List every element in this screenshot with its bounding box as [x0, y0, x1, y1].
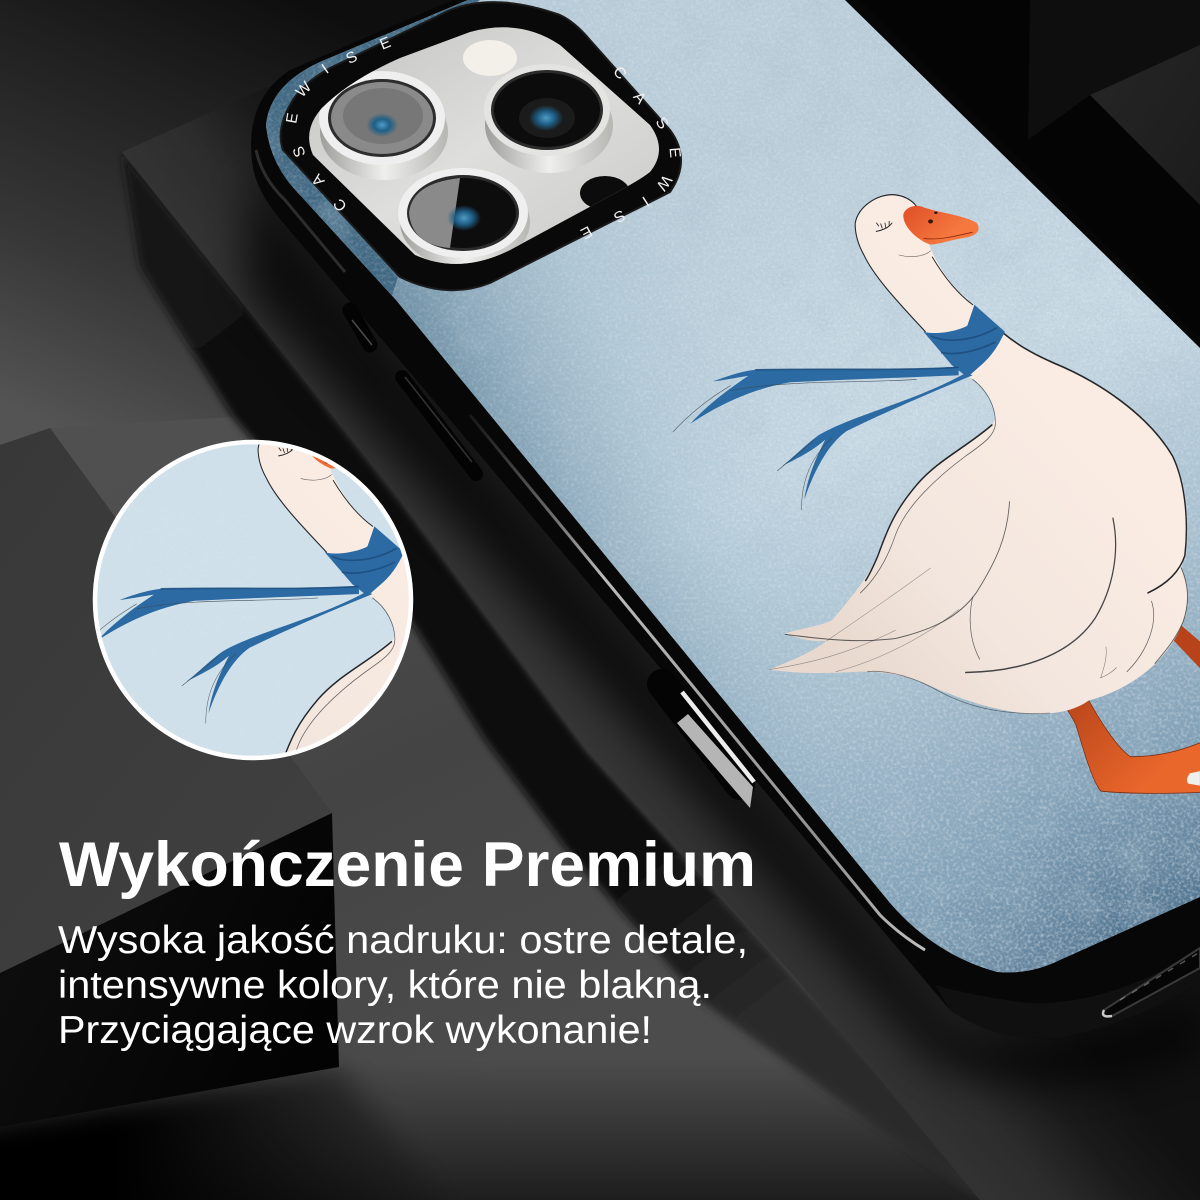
- background: left block top surface: [0, 428, 332, 973]
- lens bottom: [398, 168, 530, 268]
- background: shadow side of upper block: [122, 152, 1000, 1200]
- frame edge highlight: [256, 150, 345, 272]
- background: top-right black wedge: [850, 0, 1200, 360]
- camera ring lettering: W: [293, 78, 315, 101]
- description text: Wysoka jakość nadruku: ostre detale,: [58, 919, 748, 962]
- description text: intensywne kolory, które nie blakną.: [58, 964, 712, 1007]
- side button: silver key: [662, 684, 754, 808]
- camera ring lettering: C: [609, 63, 630, 83]
- description text: Przyciągające wzrok wykonanie!: [58, 1009, 652, 1052]
- camera ring lettering: I: [319, 61, 332, 78]
- camera black ring: [281, 2, 681, 290]
- camera ring lettering: C: [330, 195, 351, 214]
- silver frame highlight line: [470, 415, 925, 950]
- charging port: [1103, 948, 1200, 1016]
- lens top left: [319, 71, 448, 180]
- camera ring lettering: E: [578, 222, 595, 242]
- camera ring lettering: S: [290, 144, 310, 159]
- camera module: [281, 2, 683, 290]
- phone black frame: [251, 0, 1200, 1038]
- dark blue sliver around camera: [250, 0, 480, 296]
- camera ring lettering: W: [652, 172, 675, 194]
- lens top right: [484, 64, 613, 173]
- camera ring lettering: S: [611, 206, 628, 226]
- camera ring lettering: [283, 34, 683, 242]
- printed artwork background: [250, 0, 1200, 1000]
- camera ring lettering: E: [666, 147, 683, 159]
- background: top-right grey block: [1090, 45, 1200, 205]
- phone case: [250, 0, 1200, 1038]
- frame side shading: [935, 950, 1200, 1038]
- background: lower floor surface: [0, 417, 1000, 1200]
- inset detail circle: [92, 440, 414, 760]
- description text: [58, 919, 748, 1052]
- microphone hole: [580, 176, 628, 206]
- flash: [463, 40, 517, 76]
- camera ring lettering: A: [308, 170, 328, 189]
- artwork goose: [673, 195, 1200, 793]
- camera ring lettering: A: [630, 89, 650, 108]
- background: top-right upper wall: [1028, 0, 1200, 140]
- camera ring lettering: E: [377, 34, 393, 54]
- phone shadow: [245, 170, 1200, 1083]
- side button: volume slot: [402, 377, 476, 474]
- title: Wykończenie Premium: [59, 830, 756, 900]
- camera ring lettering: S: [652, 114, 672, 133]
- side button: slot upper: [350, 310, 372, 345]
- background: left block front face: [0, 813, 339, 1127]
- camera ring lettering: S: [343, 48, 360, 68]
- background: ground shadow at lower left: [0, 1067, 480, 1200]
- inset goose close-up: [100, 444, 409, 752]
- camera ring lettering: I: [639, 192, 652, 209]
- camera glass plate: [309, 27, 659, 264]
- camera ring lettering: E: [283, 112, 302, 125]
